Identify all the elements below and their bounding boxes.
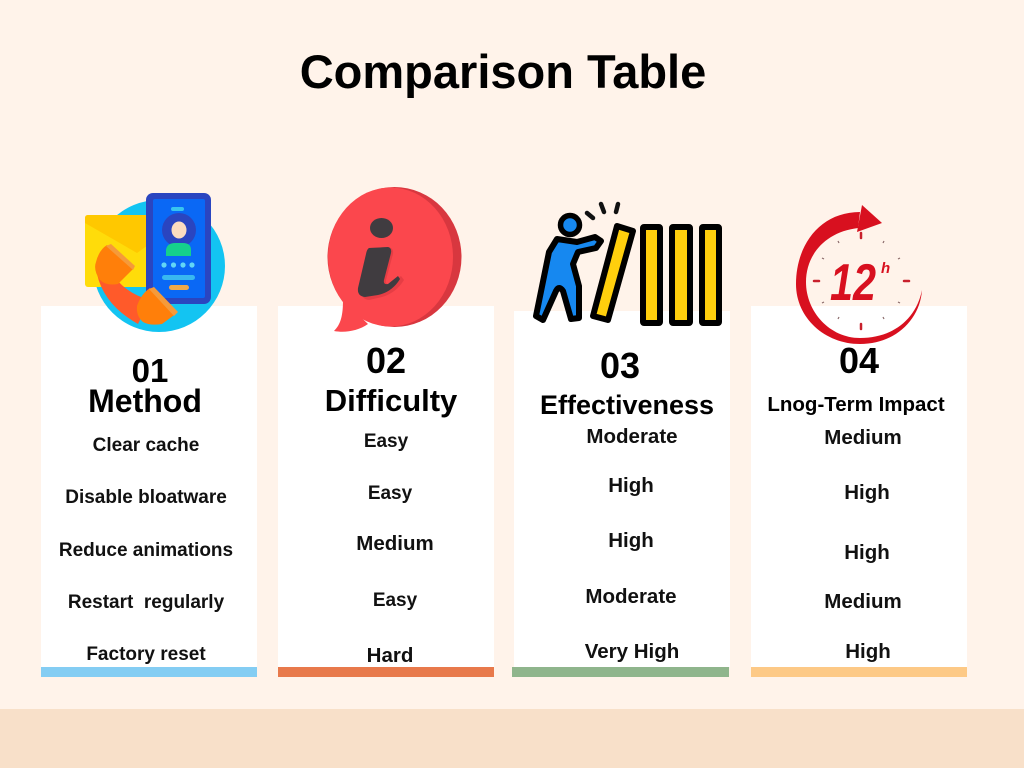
row text: Reduce animations — [59, 540, 233, 561]
panel: long-term impact — [751, 306, 967, 677]
panel: difficulty — [278, 306, 494, 677]
card: impact background — [751, 306, 967, 667]
icon: info speech bubble — [328, 187, 462, 332]
row text: High — [844, 481, 890, 504]
row text: Medium — [824, 426, 902, 449]
heading: Lnog-Term Impact: Lnog-Term Impact — [767, 393, 945, 416]
card: method background — [41, 306, 257, 667]
row text: Very High — [585, 640, 679, 663]
card: difficulty background — [278, 306, 494, 667]
number 03: 03 — [600, 345, 640, 386]
row text: Clear cache — [93, 435, 199, 456]
accent bar: effectiveness — [512, 667, 729, 677]
icon: phone and mail — [85, 193, 225, 332]
row text: Easy — [364, 431, 408, 452]
footer band — [0, 709, 1024, 768]
row text: Hard — [367, 644, 413, 667]
number 02: 02 — [366, 340, 406, 381]
number 01: 01 — [132, 352, 168, 389]
icon: 12h clock — [796, 205, 922, 344]
heading: Method: Method — [88, 383, 202, 419]
heading: Effectiveness: Effectiveness — [540, 390, 714, 420]
row text: High — [844, 541, 890, 564]
column: method — [59, 352, 233, 665]
column: difficulty — [325, 340, 457, 667]
icon: falling dominoes — [536, 204, 719, 323]
number 04: 04 — [839, 340, 879, 381]
icon: 12h clock: h — [881, 260, 890, 277]
accent bar: method — [41, 667, 257, 677]
row text: Easy — [373, 590, 417, 611]
heading: Difficulty: Difficulty — [325, 383, 457, 418]
column: long-term impact — [767, 340, 945, 663]
row text: Easy — [368, 483, 412, 504]
row text: Moderate — [585, 585, 677, 608]
row text: Medium — [356, 532, 434, 555]
accent bar: difficulty — [278, 667, 494, 677]
row text: High — [845, 640, 891, 663]
panel: effectiveness — [512, 311, 730, 677]
column: effectiveness — [540, 345, 714, 663]
panel: method — [41, 306, 257, 677]
card: effectiveness background — [514, 311, 730, 667]
title: Comparison Table — [300, 45, 706, 98]
row text: High — [608, 474, 654, 497]
icon: 12h clock: 12 — [830, 254, 876, 312]
row text: Restart regularly — [68, 592, 224, 613]
row text: Medium — [824, 590, 902, 613]
row text: Disable bloatware — [65, 487, 227, 508]
accent bar: impact — [751, 667, 967, 677]
row text: Moderate — [586, 425, 678, 448]
row text: High — [608, 529, 654, 552]
row text: Factory reset — [86, 644, 206, 665]
